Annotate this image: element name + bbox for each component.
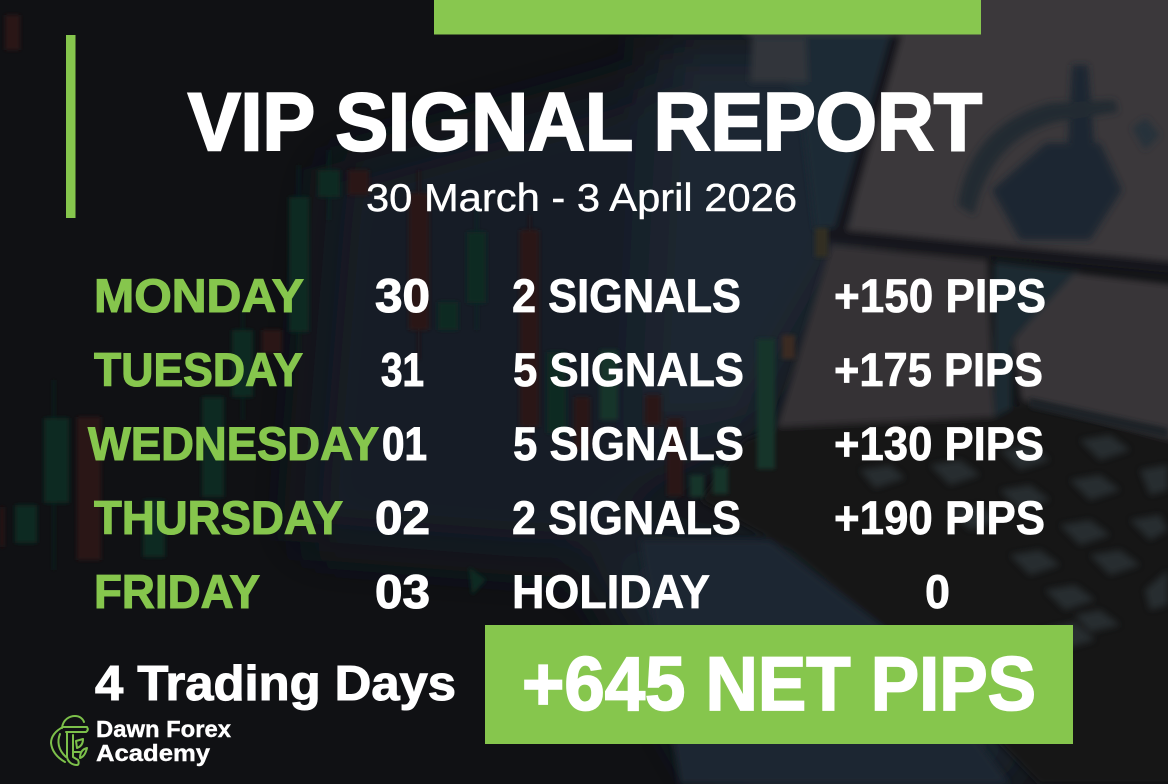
- row: Tuesday: TUESDAY: [94, 343, 303, 396]
- row: Wednesday: 5 SIGNALS: [513, 417, 744, 470]
- row: Tuesday: +175 PIPS: [834, 343, 1043, 396]
- row: Friday: FRIDAY: [94, 565, 260, 618]
- lower panels: [777, 245, 994, 427]
- title: VIP SIGNAL REPORT: [188, 77, 982, 168]
- keyboard keys: [860, 435, 1168, 650]
- table: daily signal results: [88, 269, 1046, 618]
- laptop screen logo shape: [958, 65, 1160, 240]
- net pips total box: [485, 625, 1073, 744]
- row: Wednesday: [88, 417, 1044, 470]
- icon: Dawn Forex Academy logo: [51, 716, 88, 765]
- left green accent bar: [66, 35, 76, 218]
- row: Monday: 2 SIGNALS: [512, 269, 741, 322]
- row: Thursday: THURSDAY: [94, 491, 343, 544]
- row: Wednesday: 01: [382, 417, 427, 470]
- brand name: Dawn Forex: [96, 716, 231, 742]
- row: Wednesday: +130 PIPS: [834, 417, 1044, 470]
- top green bar: [434, 0, 981, 34]
- row: Tuesday: 5 SIGNALS: [513, 343, 744, 396]
- dark navy glow: [300, 40, 1040, 784]
- row: Friday: 0: [925, 565, 950, 618]
- row: Thursday: 2 SIGNALS: [512, 491, 741, 544]
- candlesticks: [0, 15, 828, 595]
- row: Tuesday: 31: [381, 343, 424, 396]
- net pips total box: +645 NET PIPS: [522, 642, 1036, 727]
- row: Wednesday: WEDNESDAY: [88, 417, 379, 470]
- dark bezel lines: [834, 35, 902, 232]
- row: Monday: MONDAY: [94, 269, 304, 322]
- row: Tuesday: [94, 343, 1043, 396]
- small top rectangle: [750, 38, 808, 82]
- row: Friday: HOLIDAY: [512, 565, 710, 618]
- keyboard deck: [700, 403, 1168, 784]
- row: Monday: +150 PIPS: [834, 269, 1046, 322]
- row: Monday: [94, 269, 1046, 322]
- trading days count: 4 Trading Days: [95, 657, 456, 711]
- brand name: Academy: [96, 740, 210, 766]
- brand name: [96, 716, 231, 766]
- date subtitle: 30 March - 3 April 2026: [366, 177, 797, 220]
- row: Monday: 30: [375, 269, 430, 322]
- row: Thursday: [94, 491, 1045, 544]
- blurred screen label strip: [1030, 398, 1168, 438]
- row: Friday: [94, 565, 950, 618]
- row: Thursday: +190 PIPS: [834, 491, 1045, 544]
- row: Friday: 03: [375, 565, 430, 618]
- row: Thursday: 02: [375, 491, 430, 544]
- laptop screen: [745, 0, 1168, 268]
